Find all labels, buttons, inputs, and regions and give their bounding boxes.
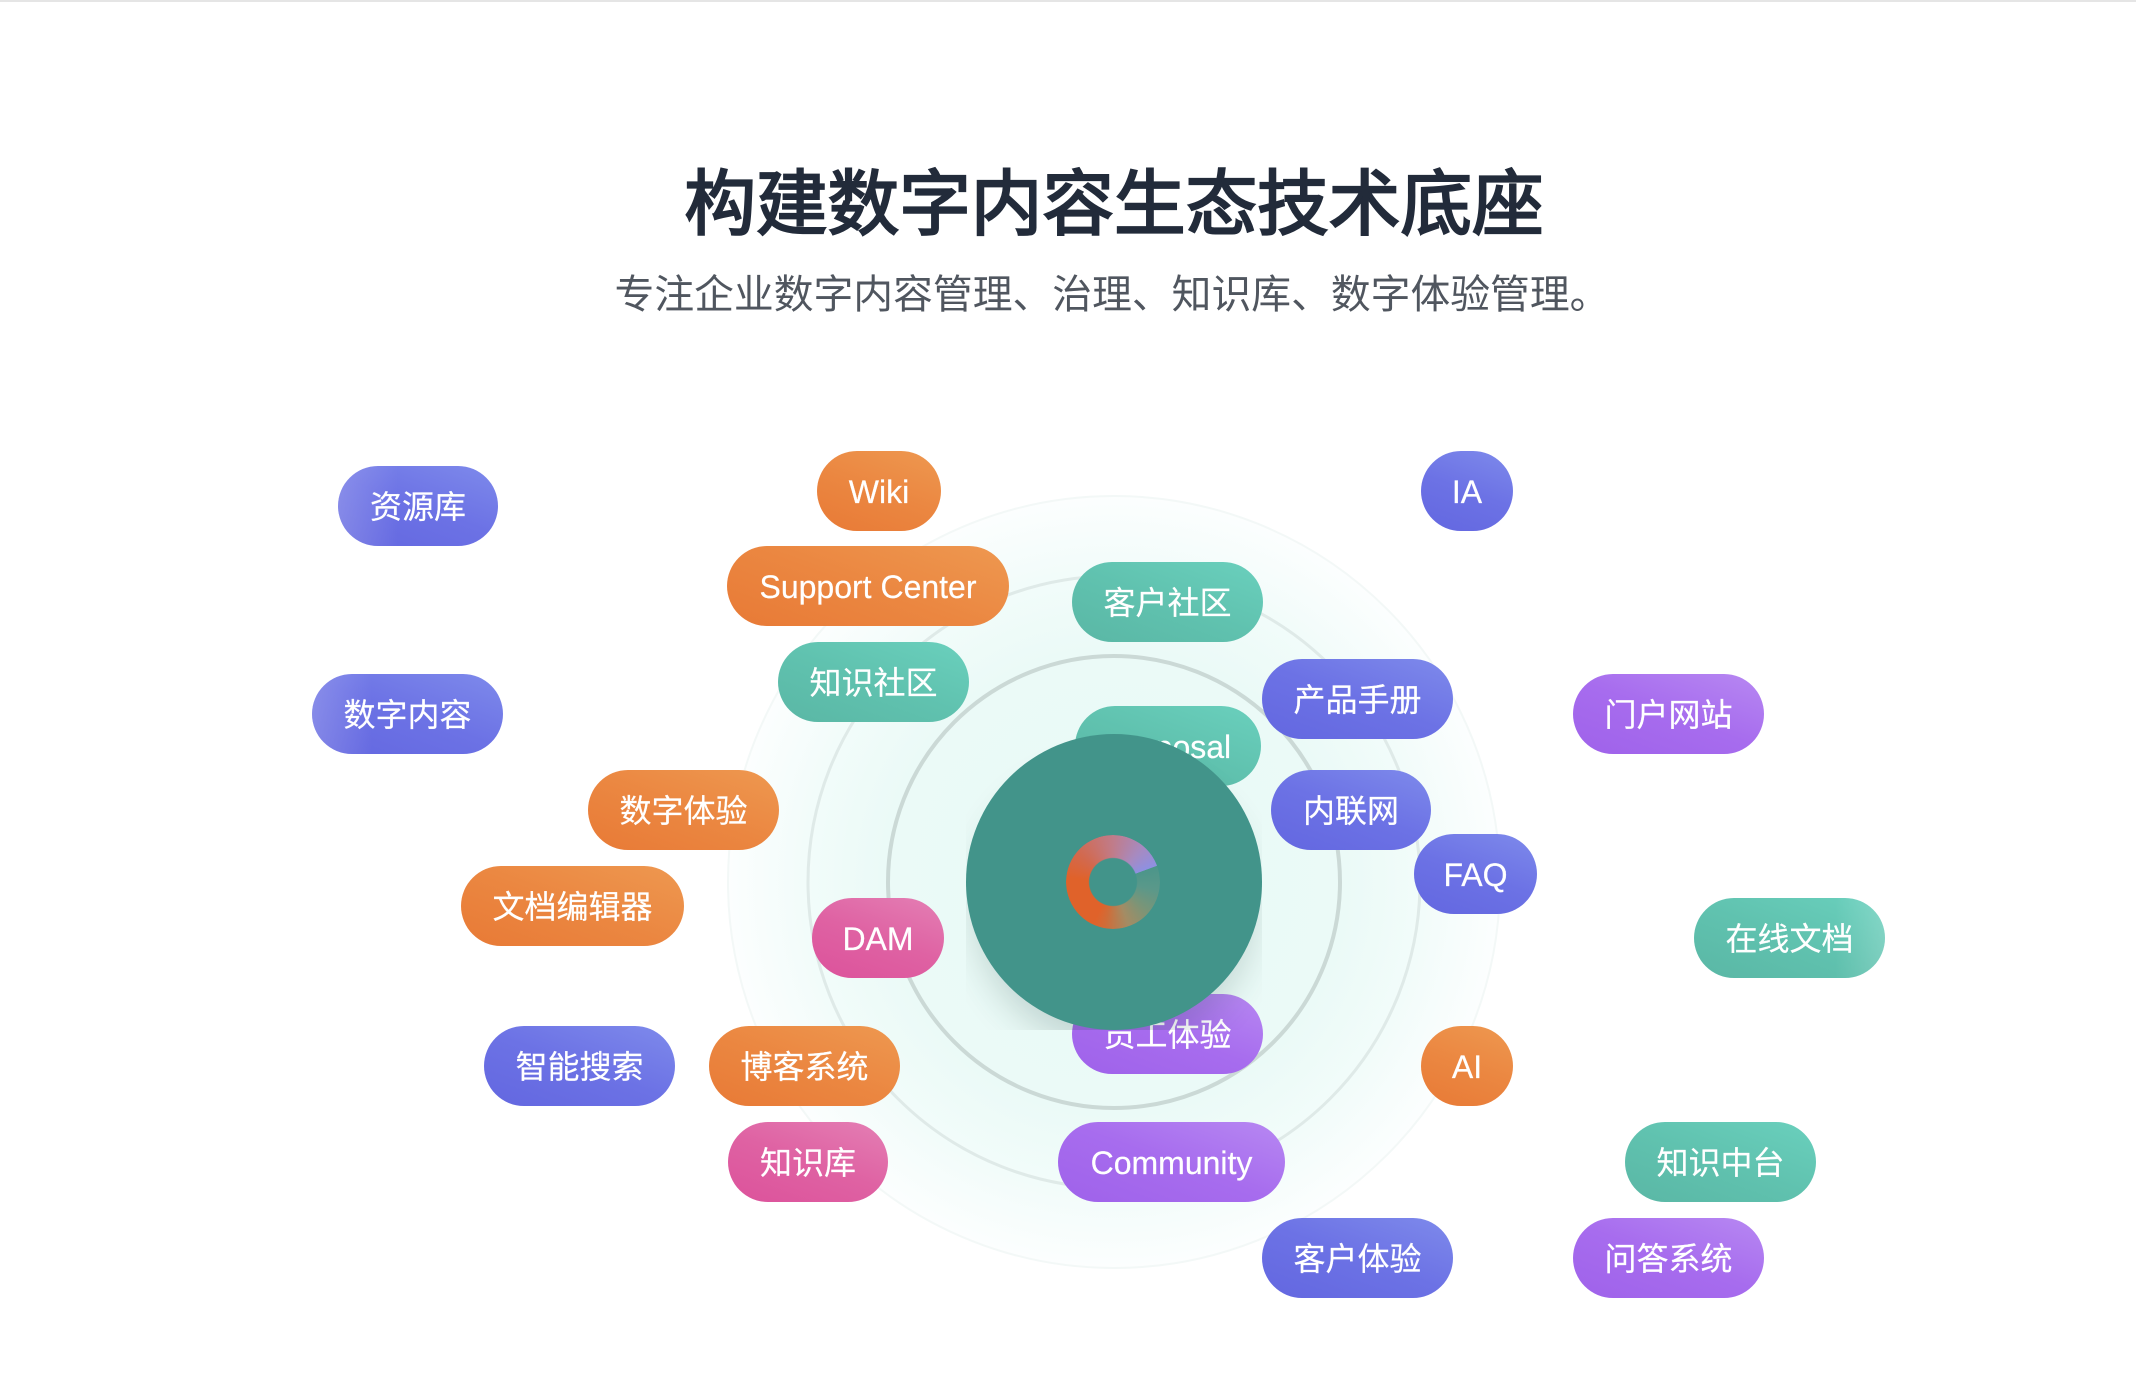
- pill: Wiki: [817, 451, 941, 531]
- pill: AI: AI: [1452, 1049, 1482, 1085]
- icon: center donut logo: [1066, 835, 1160, 929]
- pill: 智能搜索: [484, 1026, 675, 1106]
- pill: Proposal: Proposal: [1105, 729, 1231, 765]
- pill: 文档编辑器: 文档编辑器: [492, 889, 652, 925]
- pill: DAM: [812, 898, 944, 978]
- pill: 产品手册: 产品手册: [1293, 682, 1422, 718]
- pill: 客户社区: [1072, 562, 1263, 642]
- pill: 内联网: 内联网: [1303, 793, 1399, 829]
- pill: 知识中台: 知识中台: [1656, 1145, 1784, 1181]
- pill: AI: [1421, 1026, 1513, 1106]
- pill: 知识社区: [778, 642, 969, 722]
- pill: 知识社区: 知识社区: [809, 665, 938, 701]
- pill: Community: Community: [1091, 1145, 1252, 1181]
- subtitle: 专注企业数字内容管理、治理、知识库、数字体验管理。: [615, 273, 1609, 317]
- pill: 内联网: [1271, 770, 1431, 850]
- pill: Community: [1058, 1122, 1285, 1202]
- pill: 在线文档: [1694, 898, 1885, 978]
- pill: 客户体验: 客户体验: [1293, 1241, 1422, 1277]
- pill: Support Center: [727, 546, 1009, 626]
- pill: 问答系统: [1573, 1218, 1764, 1298]
- pill: 客户体验: [1262, 1218, 1453, 1298]
- pill: 博客系统: [709, 1026, 900, 1106]
- pill: 数字体验: 数字体验: [619, 793, 748, 829]
- pill: 博客系统: 博客系统: [740, 1049, 868, 1085]
- pill: 资源库: 资源库: [370, 489, 466, 525]
- pill: 问答系统: 问答系统: [1604, 1241, 1732, 1277]
- pill: 知识库: 知识库: [760, 1145, 856, 1181]
- pill: 智能搜索: 智能搜索: [515, 1049, 644, 1085]
- pill: 员工体验: 员工体验: [1103, 1017, 1232, 1053]
- pill: DAM: DAM: [842, 921, 914, 957]
- pill: 知识中台: [1625, 1122, 1816, 1202]
- pill: 数字体验: [588, 770, 779, 850]
- pill: 数字内容: 数字内容: [343, 697, 472, 733]
- pill: Proposal: [1075, 706, 1261, 786]
- pill: 数字内容: [312, 674, 503, 754]
- center circle: [966, 734, 1262, 1030]
- pill: Wiki: Wiki: [849, 474, 909, 510]
- pill: Support Center: Support Center: [759, 569, 976, 605]
- title: 构建数字内容生态技术底座: [684, 165, 1544, 245]
- pill: FAQ: [1414, 834, 1537, 914]
- pill: 知识库: [728, 1122, 888, 1202]
- pill: 产品手册: [1262, 659, 1453, 739]
- pill: 门户网站: [1573, 674, 1764, 754]
- pill: 客户社区: 客户社区: [1103, 585, 1232, 621]
- pill: 在线文档: 在线文档: [1725, 921, 1854, 957]
- pill: IA: IA: [1452, 474, 1482, 510]
- pill: 员工体验: [1072, 994, 1263, 1074]
- pill: 门户网站: 门户网站: [1604, 697, 1732, 733]
- pill: 资源库: [338, 466, 498, 546]
- pill: IA: [1421, 451, 1513, 531]
- pill: FAQ: FAQ: [1443, 857, 1508, 893]
- pill: 文档编辑器: [461, 866, 684, 946]
